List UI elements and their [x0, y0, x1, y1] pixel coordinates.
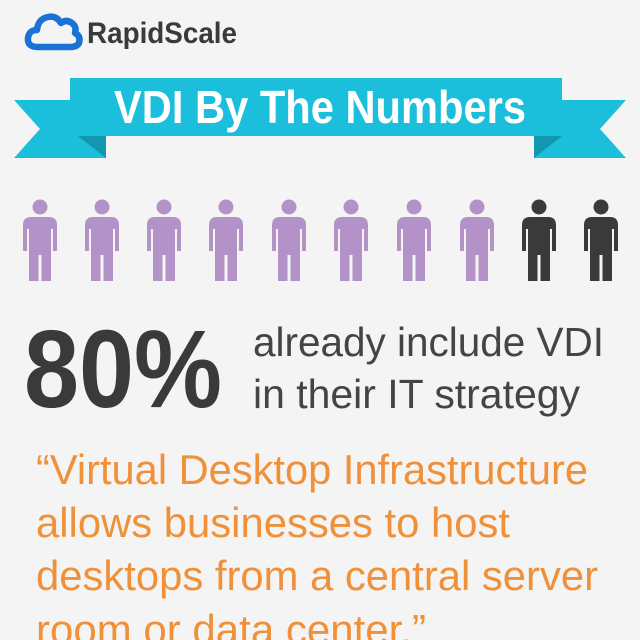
quote: [36, 446, 598, 640]
statistic description: [253, 319, 604, 417]
title: VDI By The Numbers: [114, 81, 526, 133]
statistic description: in their IT strategy: [253, 371, 580, 417]
title banner: [14, 78, 626, 158]
quote: “Virtual Desktop Infrastructure: [36, 446, 588, 493]
brand name: RapidScale: [87, 17, 237, 50]
statistic: 80%: 80%: [24, 308, 222, 431]
statistic description: already include VDI: [253, 319, 604, 365]
quote: allows businesses to host: [36, 499, 510, 546]
icon: cloud: [28, 17, 80, 47]
logo: [28, 17, 237, 50]
quote: desktops from a central server: [36, 552, 598, 599]
pictogram: 8 of 10 people: [23, 200, 618, 281]
